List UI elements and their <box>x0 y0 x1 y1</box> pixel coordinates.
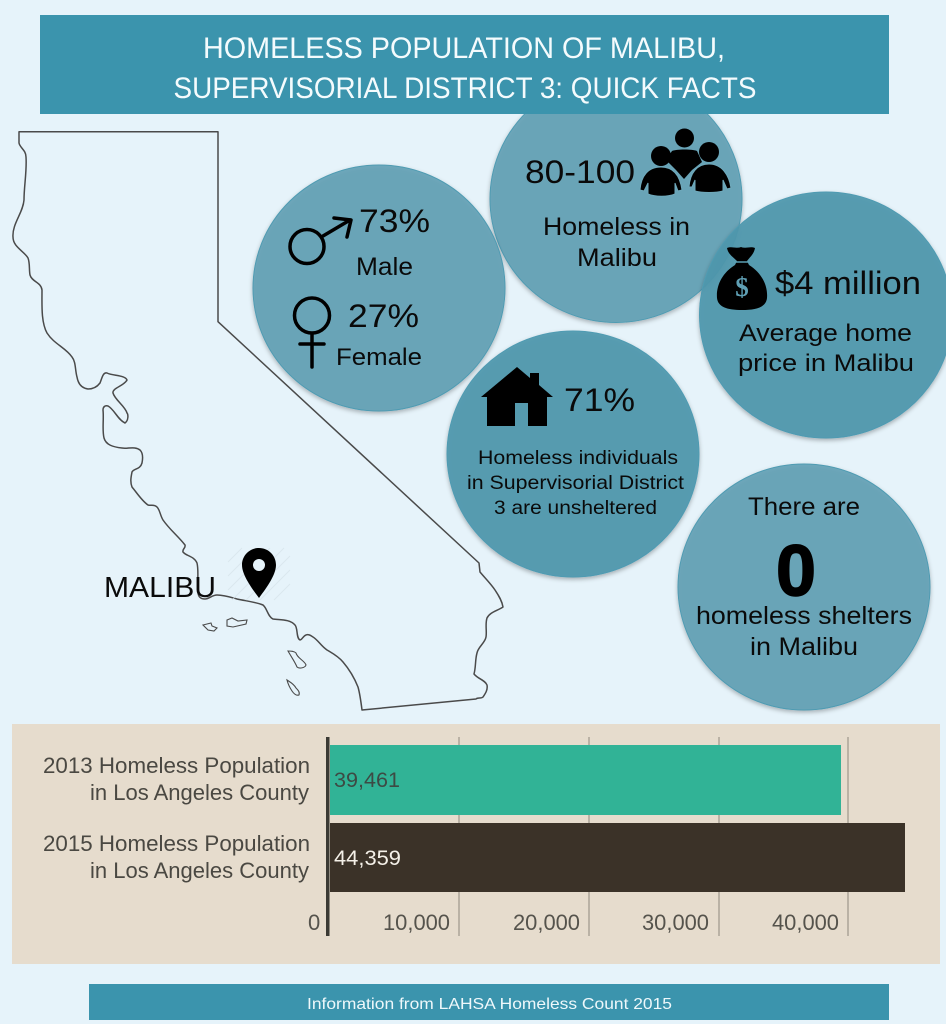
panel: bar chart <box>12 724 940 964</box>
caption: homeless shelters: homeless shelters <box>696 602 912 630</box>
caption: average home price: price in Malibu <box>738 350 914 377</box>
bar: 2013: 39,461 <box>334 768 400 792</box>
icon: map pin <box>228 548 290 600</box>
caption: homeless in Malibu: Homeless in <box>543 213 690 241</box>
row label: 2013: 2013 Homeless Population <box>43 753 310 778</box>
panel: homeless count bubble <box>490 76 742 322</box>
map of California <box>13 132 503 710</box>
caption: average home price: Average home <box>739 320 912 347</box>
stat: 80-100: 80-100 <box>525 154 635 190</box>
stat: $4 million: $4 million <box>775 265 921 301</box>
axis line <box>326 737 330 936</box>
caption: homeless in Malibu: Malibu <box>577 244 657 272</box>
axis labels: 10,000 <box>383 910 450 935</box>
icon: female symbol <box>294 298 330 367</box>
icon: money bag: $ <box>735 272 749 302</box>
icon: house <box>481 367 553 426</box>
panel: home price bubble <box>700 192 946 438</box>
stat: 27% female: 27% <box>348 298 419 334</box>
stat: 73% male: 73% <box>359 203 430 239</box>
icon: money bag <box>717 247 767 310</box>
axis labels: 40,000 <box>772 910 839 935</box>
caption: homeless shelters: in Malibu <box>750 633 858 661</box>
caption: unsheltered individuals: Homeless individuals <box>478 447 678 469</box>
map label: Malibu: MALIBU <box>104 572 216 604</box>
island: Santa Cruz group east <box>227 618 247 627</box>
caption: there are: There are <box>748 493 860 521</box>
row label: 2013: in Los Angeles County <box>90 780 309 805</box>
bar: 2013 <box>330 745 841 815</box>
island: San Clemente <box>287 680 299 695</box>
axis labels <box>308 910 839 935</box>
source note: Information from LAHSA Homeless Count 2015 <box>307 996 672 1013</box>
icon: male symbol <box>290 218 351 264</box>
footer banner <box>89 984 889 1020</box>
caption: unsheltered individuals: 3 are unsheltered <box>494 497 657 519</box>
panel: shelters bubble <box>678 464 930 710</box>
title banner <box>40 15 889 114</box>
panel: gender bubble <box>253 165 505 411</box>
caption: male: Male <box>356 253 413 281</box>
stat: zero shelters: 0 <box>776 532 816 612</box>
bar: 2015: 44,359 <box>334 846 401 870</box>
island: Santa Cruz group west <box>203 623 217 631</box>
stat: 71%: 71% <box>564 382 635 418</box>
row label: 2015: 2015 Homeless Population <box>43 831 310 856</box>
axis labels: 30,000 <box>642 910 709 935</box>
axis labels: 20,000 <box>513 910 580 935</box>
axis labels: 0 <box>308 910 320 935</box>
title text: HOMELESS POPULATION OF MALIBU, <box>203 32 725 65</box>
caption: female: Female <box>336 344 422 371</box>
row label: 2015: in Los Angeles County <box>90 858 309 883</box>
caption: unsheltered individuals: in Supervisorial District <box>467 472 685 494</box>
title text: SUPERVISORIAL DISTRICT 3: QUICK FACTS <box>174 72 756 105</box>
panel: unsheltered bubble <box>447 331 699 577</box>
icon: group of people <box>640 128 731 196</box>
bar: 2015 <box>330 823 905 892</box>
island: Santa Catalina <box>288 651 306 668</box>
